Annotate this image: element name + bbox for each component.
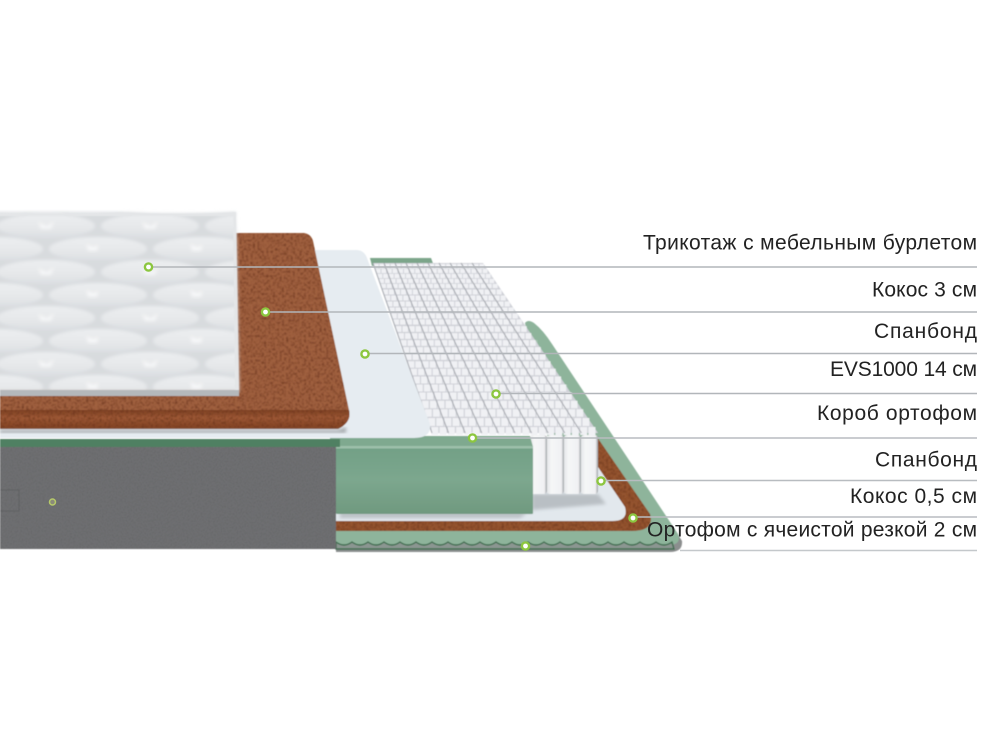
pocket springs: front row xyxy=(530,435,598,494)
brand tag on side panel xyxy=(0,490,19,511)
bottom rim: grey cover edge xyxy=(336,528,682,552)
pocket spring block: top surface xyxy=(373,263,598,433)
bottom layer: green cellular foam xyxy=(336,321,679,549)
lower spunbond layer xyxy=(336,464,626,521)
label: spunbond upper: Спанбонд xyxy=(874,320,977,343)
grey mattress side panel xyxy=(0,439,340,549)
upper coconut layer xyxy=(0,233,350,429)
label: orthofoam box: Короб ортофом xyxy=(817,402,977,425)
label: spunbond lower: Спанбонд xyxy=(875,448,977,472)
mattress illustration xyxy=(0,212,682,552)
label: coconut 0.5 cm: Кокос 0,5 см xyxy=(850,485,977,508)
shadow of upper coconut layer xyxy=(0,427,346,433)
label: cellular-cut orthofoam: Ортофом с ячеистой резкой 2 см xyxy=(647,518,977,542)
marker dots xyxy=(50,263,637,550)
label: knit with furniture welt: Трикотаж с мебельным бурлетом xyxy=(643,232,977,254)
layer labels xyxy=(643,232,977,542)
back green edge of box xyxy=(370,258,434,266)
upper spunbond layer xyxy=(0,250,430,438)
label: coconut 3 cm: Кокос 3 см xyxy=(872,278,977,302)
lower coconut layer xyxy=(336,437,651,531)
label: EVS1000 springs: EVS1000 14 см xyxy=(830,358,977,381)
leader lines xyxy=(148,267,977,550)
foam box: side block xyxy=(330,436,533,514)
quilted knit top layer xyxy=(0,212,239,396)
shadow under foam and springs xyxy=(340,494,606,518)
